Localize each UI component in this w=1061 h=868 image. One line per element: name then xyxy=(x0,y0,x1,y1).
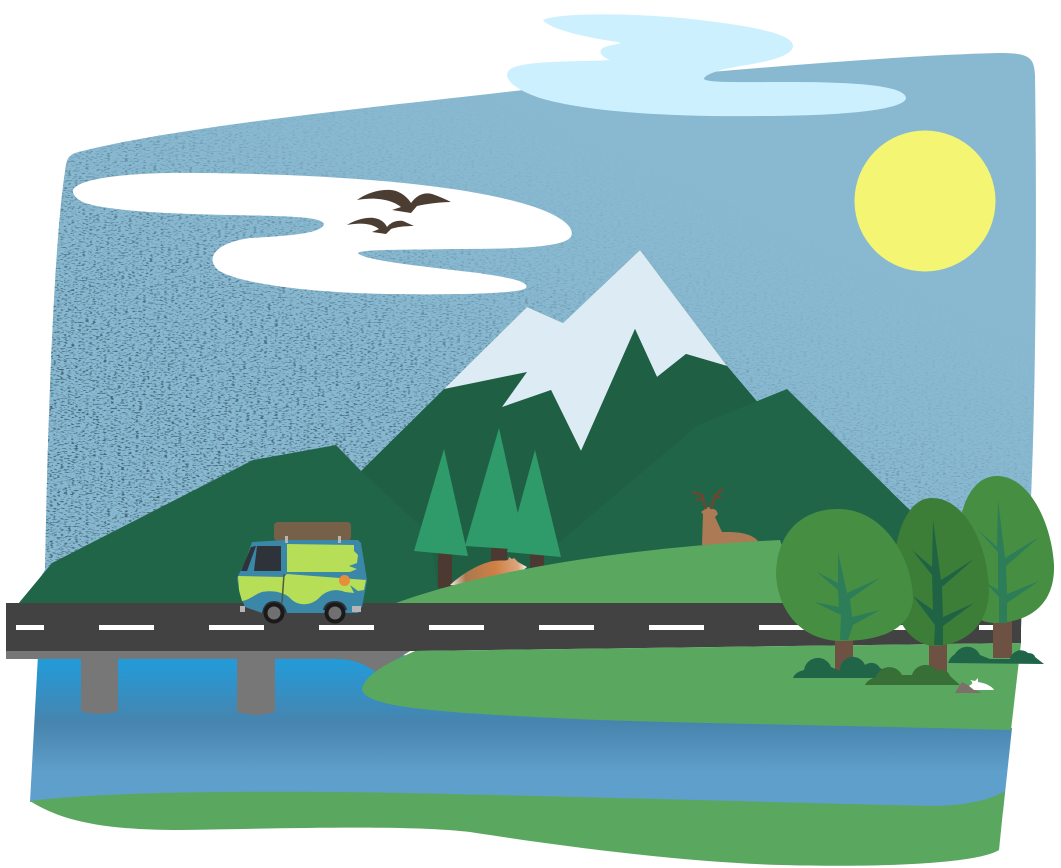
cloud: top light blue xyxy=(507,14,906,116)
mountain: right ridge xyxy=(500,389,940,604)
road xyxy=(6,603,1021,651)
trunks xyxy=(438,552,452,588)
rock xyxy=(955,682,982,693)
bird: large xyxy=(357,190,451,213)
tree: middle xyxy=(893,498,989,676)
bird: small xyxy=(347,218,414,234)
bridge deck xyxy=(6,645,420,672)
van body xyxy=(237,540,367,613)
deer xyxy=(692,489,758,548)
sun xyxy=(854,130,996,272)
water xyxy=(30,650,1012,812)
meadow hill xyxy=(396,540,800,604)
van logo dot xyxy=(339,575,350,586)
bush: middle xyxy=(865,665,960,685)
bushes xyxy=(793,647,1044,685)
bridge xyxy=(6,603,1021,715)
road lane markings xyxy=(16,625,1007,630)
riverbank green xyxy=(362,643,1021,730)
sky background xyxy=(40,53,1036,628)
tree: left xyxy=(776,509,913,672)
bush: right xyxy=(948,647,1044,664)
birds xyxy=(347,190,451,234)
van green paint xyxy=(287,544,358,572)
mountain: left hill xyxy=(18,445,440,604)
van xyxy=(237,522,367,624)
pine trees xyxy=(414,428,561,588)
bush: left xyxy=(793,657,893,678)
pine foliage xyxy=(414,449,468,556)
fox xyxy=(450,557,527,590)
rabbit: white xyxy=(969,678,994,690)
mountain snow cap xyxy=(444,250,727,451)
van wheels xyxy=(262,601,287,613)
van details xyxy=(282,574,284,603)
roof rack xyxy=(274,522,351,541)
rabbits xyxy=(955,678,994,693)
tree: right xyxy=(957,476,1054,658)
cloud: white xyxy=(73,173,572,294)
bottom bank xyxy=(30,791,1005,866)
mountain: main peak xyxy=(360,250,760,604)
van window xyxy=(254,546,281,571)
bridge supports xyxy=(81,655,118,714)
